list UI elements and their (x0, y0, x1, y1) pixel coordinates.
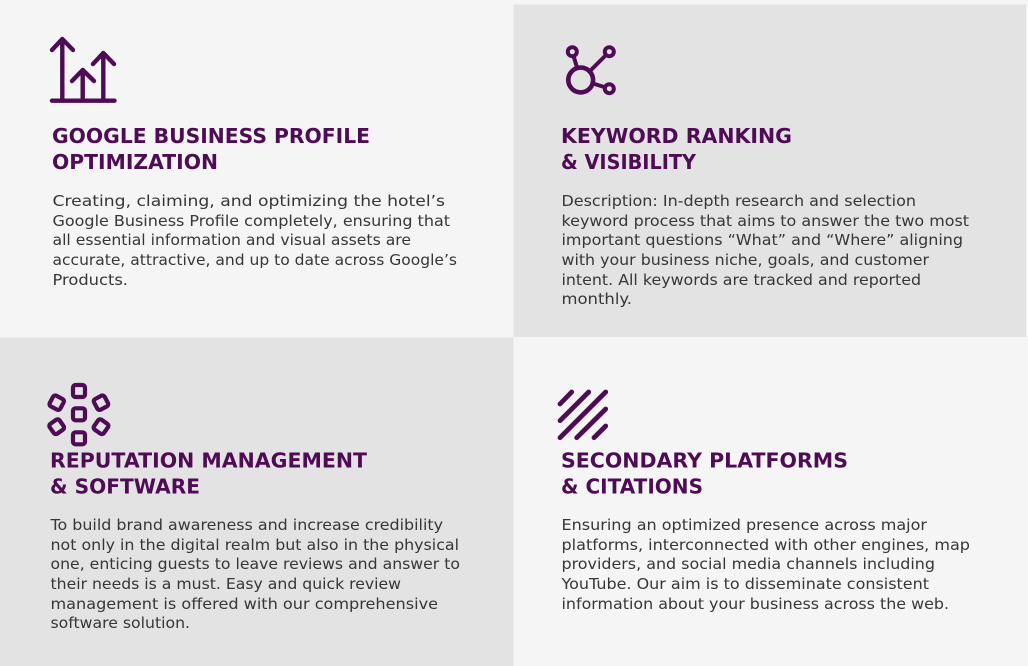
panel: Google Business Profile optimization (52, 39, 457, 289)
heading: secondary platforms and citations (561, 448, 848, 498)
panel: reputation management background (0, 338, 514, 666)
text: keyword ranking description: keyword process that aims to answer the two most (562, 212, 969, 230)
text: reputation management description (49, 516, 460, 632)
text: secondary platforms description (560, 516, 970, 613)
heading: secondary platforms and citations: SECONDARY PLATFORMS (561, 448, 848, 472)
panel: reputation management and software (48, 385, 460, 632)
text: Google Business Profile description: Creating, claiming, and optimizing the hotel’s (52, 192, 445, 210)
heading: keyword ranking and visibility: & VISIBILITY (561, 150, 697, 174)
heading: Google Business Profile optimization (52, 124, 370, 174)
icon: diagonal stripes (560, 392, 606, 438)
heading: secondary platforms and citations: & CITATIONS (561, 474, 703, 498)
text: Google Business Profile description: accurate, attractive, and up to date across Google’s (52, 251, 457, 269)
text: secondary platforms description: providers, and social media channels including (562, 555, 935, 573)
text: secondary platforms description: YouTube. Our aim is to disseminate consistent (560, 575, 929, 593)
icon: network nodes (568, 47, 614, 93)
text: reputation management description: their needs is a must. Easy and quick review (50, 575, 401, 593)
text: keyword ranking description: with your business niche, goals, and customer (562, 251, 930, 269)
text: keyword ranking description (562, 192, 969, 308)
heading: reputation management and software: REPUTATION MANAGEMENT (50, 448, 368, 472)
panel: keyword ranking and visibility (561, 47, 969, 308)
panel: keyword ranking background (514, 4, 1026, 337)
text: reputation management description: To build brand awareness and increase credibility (49, 516, 443, 534)
heading: keyword ranking and visibility: KEYWORD RANKING (561, 124, 792, 148)
heading: Google Business Profile optimization: GOOGLE BUSINESS PROFILE (52, 124, 370, 148)
text: reputation management description: not only in the digital realm but also in the physical (50, 536, 459, 554)
text: keyword ranking description: Description: In-depth research and selection (562, 192, 916, 210)
text: reputation management description: one, enticing guests to leave reviews and answer to (50, 555, 460, 573)
text: Google Business Profile description: Google Business Profile completely, ensuring that (52, 212, 450, 230)
text: keyword ranking description: monthly. (562, 290, 632, 308)
text: Google Business Profile description: all essential information and visual assets are (52, 231, 411, 249)
text: Google Business Profile description (52, 192, 457, 289)
heading: keyword ranking and visibility (561, 124, 792, 174)
heading: Google Business Profile optimization: OPTIMIZATION (52, 150, 218, 174)
panel: secondary platforms and citations (560, 392, 970, 613)
heading: reputation management and software: & SOFTWARE (50, 474, 200, 498)
icon: rising arrows chart (52, 39, 114, 101)
text: secondary platforms description: platforms, interconnected with other engines, map (562, 536, 970, 554)
text: secondary platforms description: Ensuring an optimized presence across major (562, 516, 928, 534)
heading: reputation management and software (50, 448, 368, 498)
text: keyword ranking description: important questions “What” and “Where” aligning (562, 231, 963, 249)
text: reputation management description: software solution. (50, 614, 190, 632)
icon: cluster of rounded squares (48, 385, 109, 444)
text: keyword ranking description: intent. All keywords are tracked and reported (562, 271, 921, 289)
text: secondary platforms description: information about your business across the web. (562, 595, 949, 613)
text: reputation management description: management is offered with our comprehensive (50, 595, 438, 613)
text: Google Business Profile description: Products. (52, 271, 128, 289)
